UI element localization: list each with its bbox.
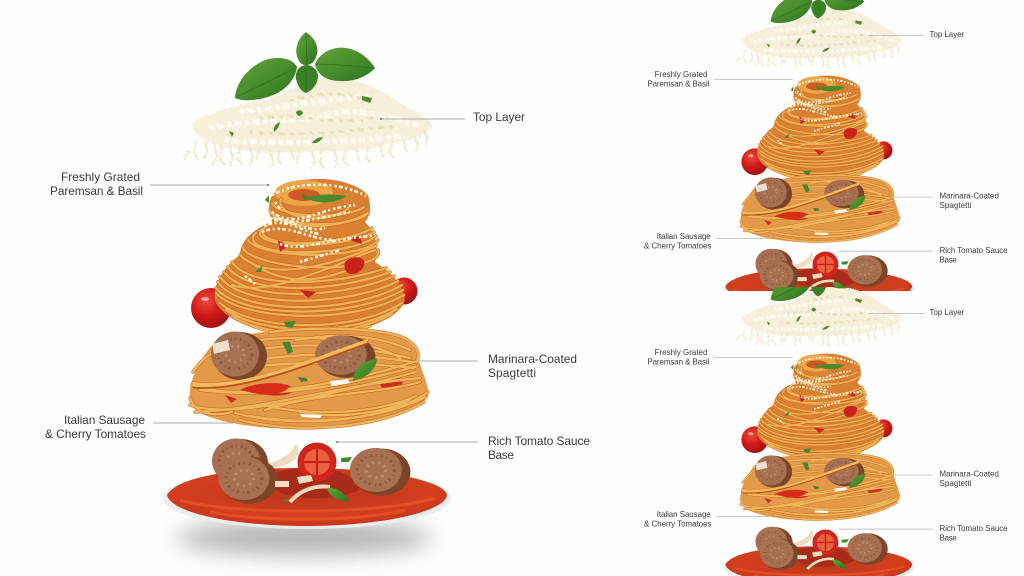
upper copy callouts: Base xyxy=(939,255,957,264)
upper copy callouts: Paremsan & Basil xyxy=(647,79,710,88)
small repeat: lower copy xyxy=(644,256,1008,576)
lower copy callouts: Spagtetti xyxy=(939,479,972,488)
upper copy callouts: Freshly Grated xyxy=(655,70,707,79)
upper copy callouts: & Cherry Tomatoes xyxy=(644,241,711,250)
lower copy callouts: Base xyxy=(939,533,957,542)
lower copy callouts: Italian Sausage xyxy=(657,510,711,519)
callout: parmesan and basil: Paremsan & Basil xyxy=(50,184,143,198)
callout: tomato sauce base: Rich Tomato Sauce xyxy=(488,434,590,448)
upper copy callouts: Spagtetti xyxy=(939,201,972,210)
small repeat: upper copy xyxy=(644,0,1008,326)
callout: parmesan and basil: Freshly Grated xyxy=(61,170,140,184)
lower copy callouts: Freshly Grated xyxy=(655,348,707,357)
callout: tomato sauce base xyxy=(336,434,590,462)
lower copy callouts: Top Layer xyxy=(929,308,965,317)
callout: tomato sauce base: Base xyxy=(488,448,514,462)
upper copy illustration xyxy=(723,0,915,326)
upper copy callouts: Top Layer xyxy=(929,30,965,39)
lower copy callouts: Marinara-Coated xyxy=(939,469,999,478)
lower copy callouts: Rich Tomato Sauce xyxy=(939,524,1008,533)
callout: marinara spaghetti: Marinara-Coated xyxy=(488,352,577,366)
callout: sausage and tomatoes: Italian Sausage xyxy=(64,413,145,427)
callout: sausage and tomatoes xyxy=(45,413,233,441)
main callouts xyxy=(45,110,590,462)
upper copy callouts: Rich Tomato Sauce xyxy=(939,246,1008,255)
lower copy callouts: & Cherry Tomatoes xyxy=(644,519,711,528)
upper copy callouts xyxy=(644,30,1008,264)
lower copy callouts xyxy=(644,308,1008,542)
upper copy callouts: Italian Sausage xyxy=(657,232,711,241)
lower copy callouts: Paremsan & Basil xyxy=(647,357,710,366)
upper copy callouts: Marinara-Coated xyxy=(939,191,999,200)
callout: marinara spaghetti: Spagtetti xyxy=(488,366,536,380)
callout: sausage and tomatoes: & Cherry Tomatoes xyxy=(45,427,146,441)
callout: top layer: Top Layer xyxy=(473,110,525,124)
main layered spaghetti illustration xyxy=(163,32,451,555)
callout: marinara spaghetti xyxy=(418,352,577,380)
lower copy illustration xyxy=(723,256,915,576)
callout: parmesan and basil xyxy=(50,170,269,198)
